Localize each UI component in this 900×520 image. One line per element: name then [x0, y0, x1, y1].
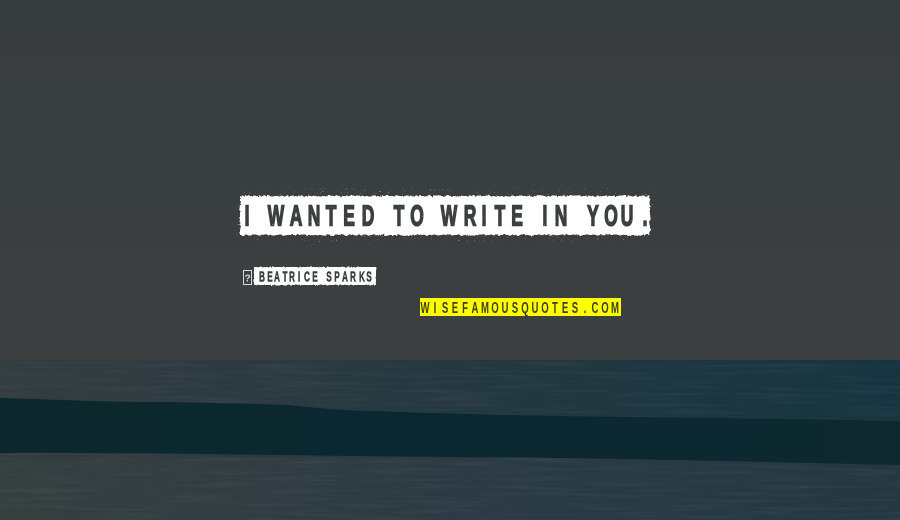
background: open sea: [0, 360, 900, 520]
watermark: wisefamousquotes.com: [420, 298, 621, 317]
quote paint specks: [236, 188, 654, 242]
attribution: Beatrice Sparks: [244, 267, 376, 285]
missing glyph box: ?: [244, 274, 251, 284]
background: water ripple texture: [0, 362, 900, 520]
watermark text: WISEFAMOUSQUOTES.COM: [420, 298, 619, 317]
author name: BEATRICESPARKS: [259, 268, 372, 285]
quote: I wanted to write in you.: [236, 188, 654, 242]
background: dusk sky: [0, 0, 900, 362]
author torn white strip: [254, 267, 376, 285]
quote torn white strip: [240, 196, 650, 235]
watermark yellow bar: [420, 298, 621, 316]
background: breaking wave: [0, 398, 900, 465]
background: foreground shallows: [0, 458, 900, 520]
quote text: IWANTEDTOWRITEINYOU.: [245, 200, 647, 233]
